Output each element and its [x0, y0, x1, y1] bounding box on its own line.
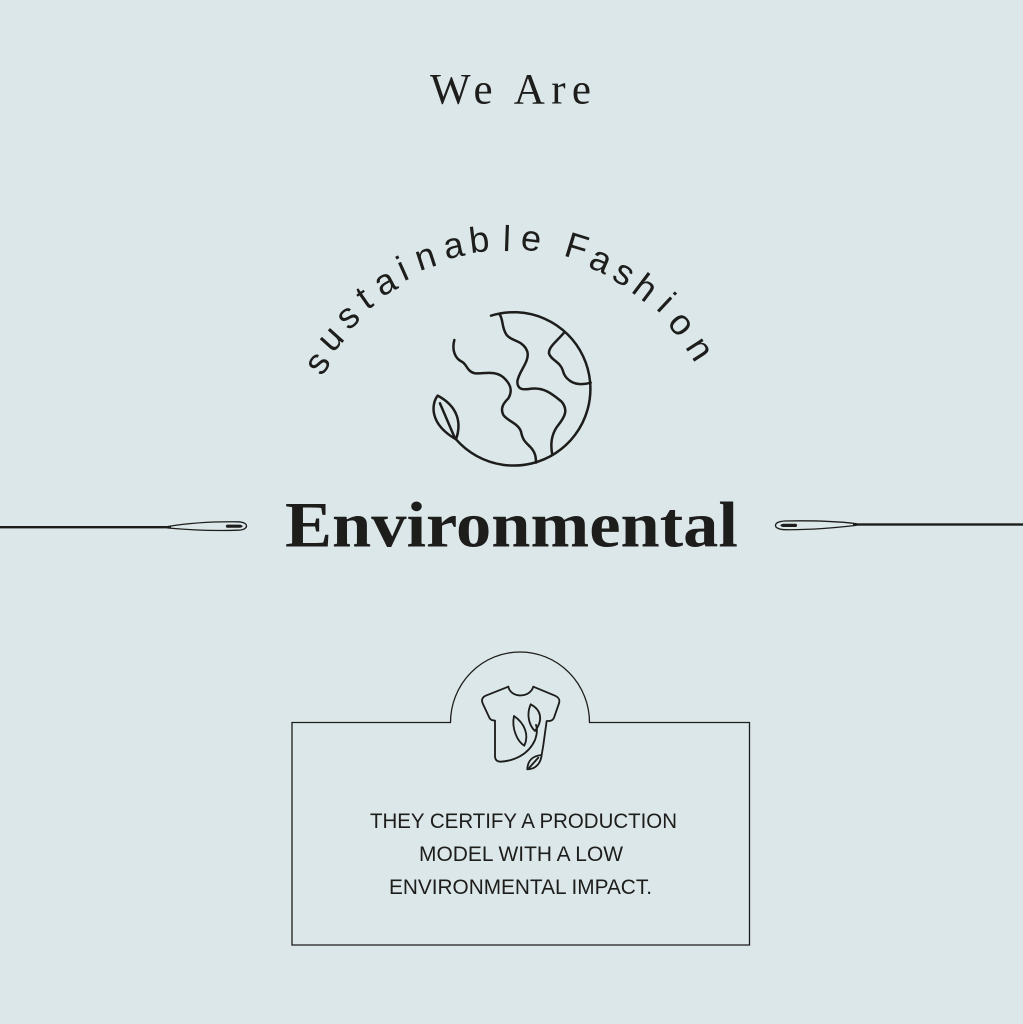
- curved heading: sustainable Fashion: [295, 216, 723, 381]
- curved heading: sustainable Fashion: n: [678, 329, 723, 368]
- heading: We Are: We Are: [430, 66, 591, 113]
- curved heading: sustainable Fashion: F: [560, 224, 593, 269]
- curved heading: sustainable Fashion: s: [606, 250, 643, 295]
- curved heading: sustainable Fashion: s: [327, 295, 367, 337]
- icon: right needle and thread: [776, 521, 1023, 530]
- curved heading: sustainable Fashion: o: [660, 302, 704, 344]
- icon: globe with leaf: [434, 312, 591, 466]
- icon: left needle and thread: [0, 522, 246, 530]
- curved heading: sustainable Fashion: l: [502, 218, 512, 259]
- curved heading: sustainable Fashion: a: [584, 236, 620, 282]
- text block: certification description: [370, 810, 677, 899]
- text block: certification description: MODEL WITH A LOW: [419, 843, 623, 866]
- curved heading: sustainable Fashion: b: [467, 218, 492, 261]
- icon: t-shirt with leaves: [482, 687, 559, 769]
- curved heading: sustainable Fashion: n: [409, 234, 441, 279]
- curved heading: sustainable Fashion: e: [519, 216, 544, 260]
- curved heading: sustainable Fashion: a: [366, 258, 404, 304]
- title: Environmental: Environmental: [285, 490, 738, 562]
- curved heading: sustainable Fashion: s: [295, 343, 338, 381]
- curved heading: sustainable Fashion: h: [625, 265, 666, 310]
- text block: certification description: THEY CERTIFY A PRODUCTION: [370, 810, 677, 833]
- panel: certification card with arched top: [292, 652, 750, 945]
- curved heading: sustainable Fashion: i: [650, 285, 684, 320]
- curved heading: sustainable Fashion: a: [439, 223, 468, 267]
- curved heading: sustainable Fashion: i: [390, 248, 414, 289]
- text block: certification description: ENVIRONMENTAL IMPACT.: [389, 876, 652, 899]
- curved heading: sustainable Fashion: u: [308, 317, 352, 359]
- curved heading: sustainable Fashion: t: [348, 278, 380, 317]
